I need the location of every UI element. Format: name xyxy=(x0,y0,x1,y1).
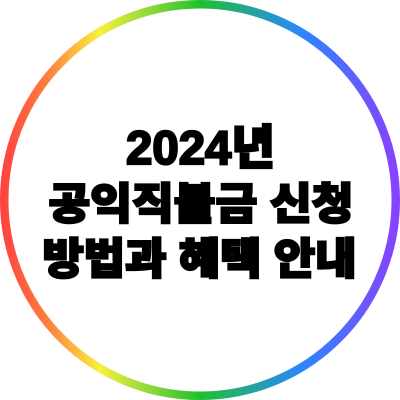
title xyxy=(42,121,356,284)
title line 2: 공익직불금 신청 xyxy=(48,181,354,229)
title line 1: 2024년 xyxy=(126,121,275,174)
title line 3: 방법과 혜택 안내 xyxy=(42,236,356,284)
